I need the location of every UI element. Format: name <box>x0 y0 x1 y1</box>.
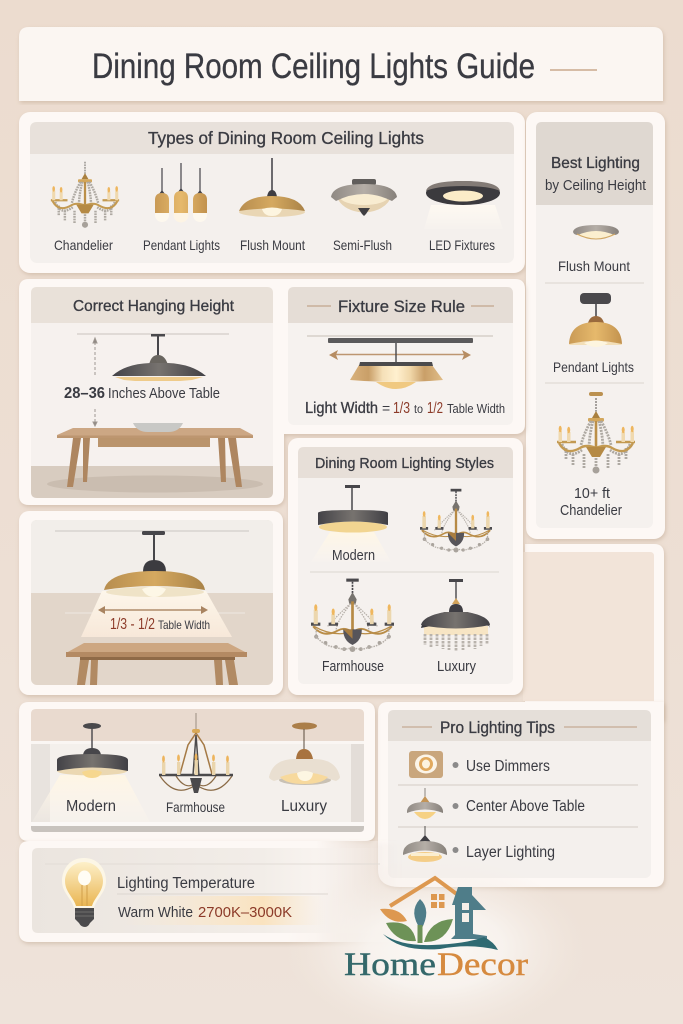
heading: fixture size: Fixture Size Rule <box>338 297 465 316</box>
panel: hanging height and size rule backing <box>19 279 525 505</box>
icon: gold pendant <box>104 531 205 597</box>
title: Dining Room Ceiling Lights Guide <box>92 47 535 86</box>
icon: farmhouse chandelier <box>311 579 394 652</box>
formula: = <box>382 400 390 416</box>
logo wave <box>383 934 498 950</box>
formula: to <box>414 402 423 416</box>
height text: Inches Above Table <box>108 386 220 402</box>
logo house roof <box>390 878 458 906</box>
label: 10+ ft: 10+ ft <box>574 485 611 502</box>
warm glow <box>118 896 325 925</box>
icon: wide fixture <box>350 343 443 389</box>
label: modern: Modern <box>332 548 375 564</box>
icon: modern <box>57 723 128 778</box>
label: farmhouse: Farmhouse <box>322 659 384 675</box>
label: modern: Modern <box>66 798 116 815</box>
icon: flush mount <box>573 225 619 239</box>
formula: Light Width <box>305 400 378 417</box>
icon: dimmer <box>409 751 443 778</box>
icon: chandelier <box>557 392 635 474</box>
icon: chandelier <box>51 162 119 228</box>
logo: HomeDecor <box>344 878 528 983</box>
formula <box>305 400 505 417</box>
width text: Table Width <box>158 618 210 632</box>
label: luxury: Luxury <box>437 659 477 675</box>
icon: pendant <box>569 293 622 347</box>
icon: modern <box>311 485 391 562</box>
height text <box>64 385 220 402</box>
logo: HomeDecor: Decor <box>437 947 528 983</box>
panel: best lighting by ceiling height <box>526 112 665 539</box>
logo wordmark: Home <box>344 947 436 983</box>
logo leaves <box>380 909 407 922</box>
icon: dark pendant <box>112 334 206 381</box>
icon: pendant lights <box>155 163 207 222</box>
label: pendant lights: Pendant Lights <box>553 359 634 375</box>
label: farmhouse: Farmhouse <box>166 799 225 815</box>
panel: lighting temperature <box>19 841 400 942</box>
heading: types: Types of Dining Room Ceiling Lights <box>148 128 424 148</box>
logo tower <box>451 887 487 939</box>
panel: types of lights <box>19 112 525 273</box>
panel: lighting styles <box>288 438 523 695</box>
icon: flush mount <box>239 158 305 217</box>
icon: luxury <box>421 579 490 651</box>
panel: empty frame right <box>523 544 664 720</box>
logo window <box>431 894 444 908</box>
label: flush mount: Flush Mount <box>240 237 305 253</box>
width arrow <box>329 350 471 360</box>
subheading: by ceiling height: by Ceiling Height <box>545 178 646 194</box>
heading: best lighting: Best Lighting <box>551 155 640 172</box>
tip: use dimmers: Use Dimmers <box>466 758 550 775</box>
heading: tips: Pro Lighting Tips <box>440 719 555 737</box>
label: flush mount: Flush Mount <box>558 258 630 274</box>
panel: correct hanging height <box>31 287 273 498</box>
formula: 1/3 <box>393 400 410 417</box>
light beam <box>32 775 150 822</box>
light beam <box>81 591 232 637</box>
width text <box>110 616 210 633</box>
heading: styles: Dining Room Lighting Styles <box>315 455 494 472</box>
panel: width illustration <box>19 511 283 695</box>
height arrow <box>93 338 97 426</box>
icon: semi-flush <box>331 179 397 216</box>
icon: light bulb <box>62 858 106 927</box>
width arrow <box>98 606 208 614</box>
icon: farmhouse <box>159 713 233 793</box>
floor <box>31 466 273 498</box>
icon: chandelier <box>420 489 492 553</box>
heading: hanging height: Correct Hanging Height <box>73 298 235 315</box>
panel: fixture size rule <box>288 287 513 425</box>
height text: 28–36 <box>64 385 105 402</box>
icon: luxury <box>269 722 340 785</box>
label: LED fixtures: LED Fixtures <box>429 237 495 253</box>
panel: style strip <box>19 702 375 841</box>
panel: tips backing <box>378 702 664 887</box>
table <box>57 428 253 487</box>
label: luxury: Luxury <box>281 798 327 815</box>
label: semi-flush: Semi-Flush <box>333 237 392 253</box>
temperature value: Warm White <box>118 904 193 921</box>
header panel <box>19 27 663 101</box>
plate <box>133 423 183 432</box>
icon: layer pendant <box>403 826 447 862</box>
label: pendant lights: Pendant Lights <box>143 237 220 253</box>
formula: Table Width <box>447 402 505 416</box>
label: chandelier: Chandelier <box>54 237 113 253</box>
tip: layer lighting: Layer Lighting <box>466 844 555 861</box>
icon: center pendant <box>407 788 443 819</box>
formula: 1/2 <box>427 400 443 417</box>
tip: center above table: Center Above Table <box>466 798 585 815</box>
label: chandelier: Chandelier <box>560 503 622 519</box>
width text: 1/3 - 1/2 <box>110 616 155 633</box>
table <box>66 643 247 685</box>
icon: LED fixture <box>424 181 503 229</box>
heading: temperature: Lighting Temperature <box>117 875 255 892</box>
logo glow <box>286 858 586 1024</box>
temperature value <box>118 904 292 921</box>
panel: pro lighting tips <box>388 710 651 878</box>
temperature value: 2700K–3000K <box>198 904 292 921</box>
